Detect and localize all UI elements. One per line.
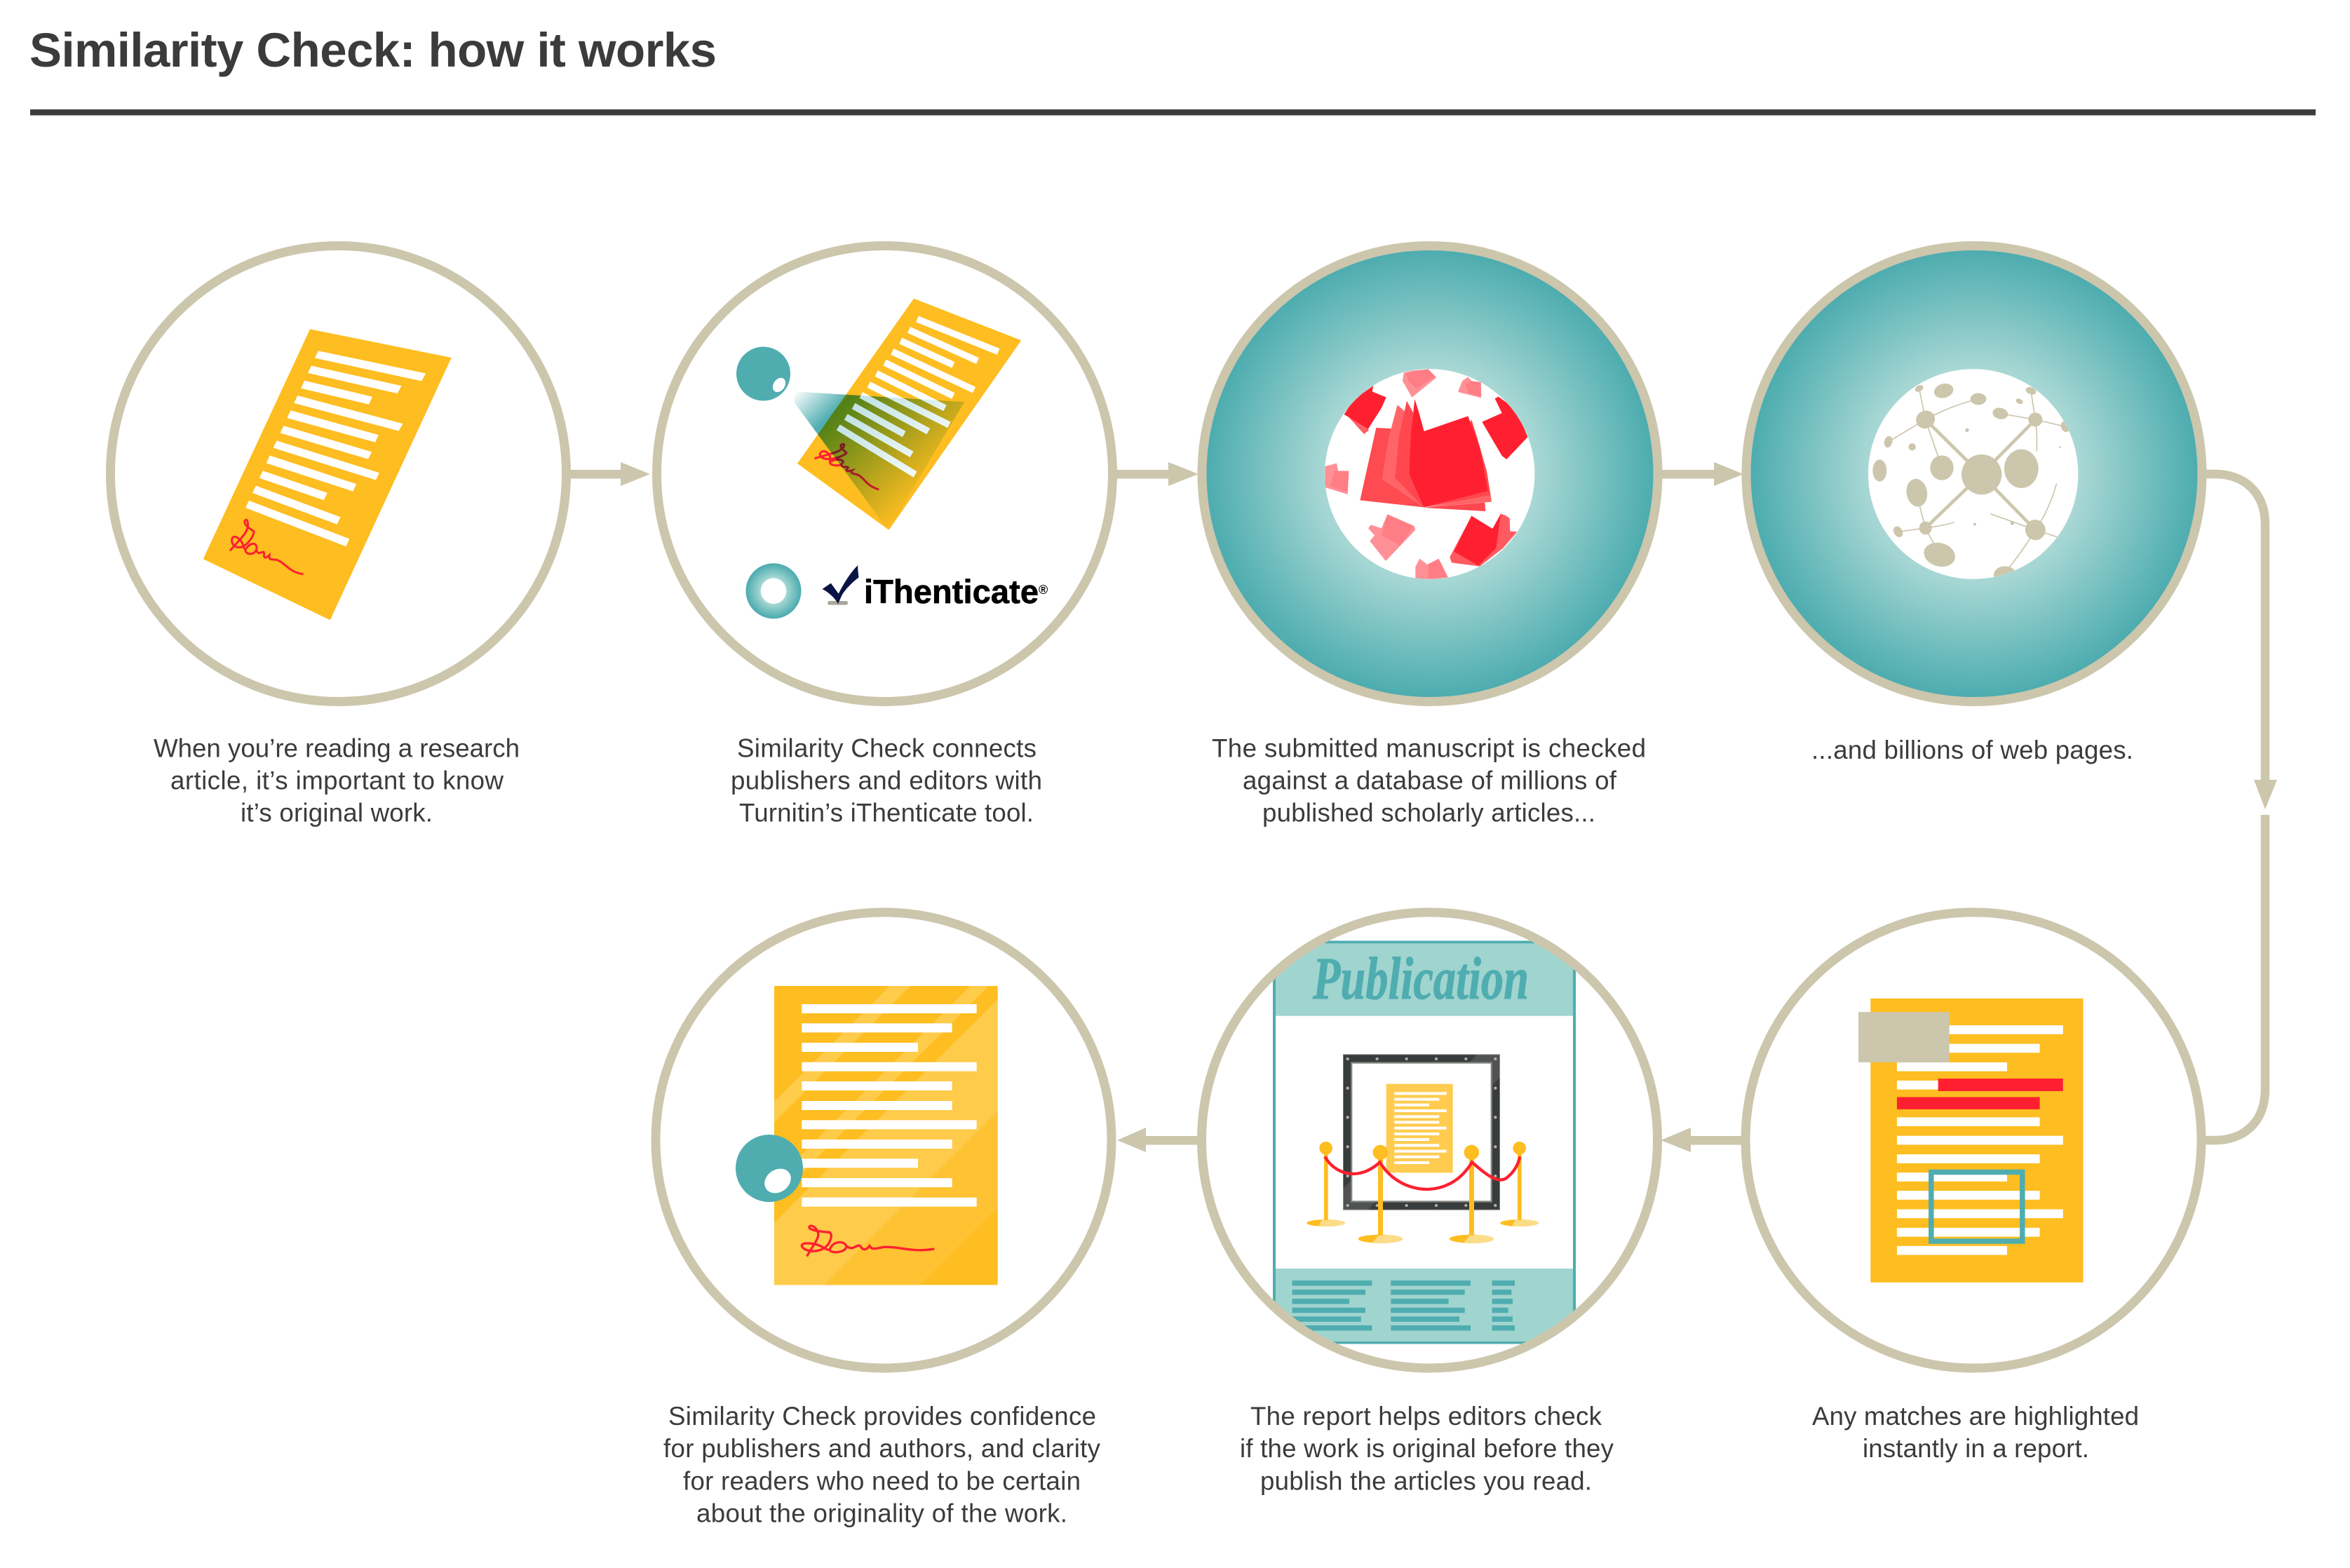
caption: step 3: The submitted manuscript is checked	[1212, 734, 1646, 763]
icon: teal lens	[736, 1135, 803, 1202]
icon: large open book	[1360, 399, 1492, 511]
arrow: step 2 to step 3	[1115, 462, 1198, 486]
panel: step 7 confidence and clarity	[656, 912, 1112, 1368]
title rule	[30, 109, 2316, 115]
panel: step 2 iThenticate scan	[656, 245, 1112, 701]
icon: report document	[1858, 999, 2084, 1283]
red rope	[1325, 1156, 1520, 1189]
panel: step 6 publication	[1202, 912, 1658, 1368]
caption: step 1: it’s original work.	[241, 798, 433, 827]
title: Similarity Check: how it works	[29, 23, 717, 77]
caption: step 5: instantly in a report.	[1863, 1434, 2089, 1463]
logo: iThenticate: iThenticate	[864, 573, 1039, 610]
logo: iThenticate	[823, 565, 1048, 610]
framed document	[1386, 1084, 1453, 1172]
caption: step 7: for readers who need to be certain	[683, 1467, 1081, 1495]
caption: step 6	[1240, 1402, 1614, 1495]
caption: step 6: publish the articles you read.	[1260, 1467, 1592, 1495]
arrow: step 1 to step 2	[568, 462, 650, 486]
caption: step 7: Similarity Check provides confidence	[668, 1402, 1096, 1431]
footer text columns	[1292, 1280, 1515, 1331]
icon: ring logo	[746, 563, 801, 619]
icon: cluster of red books	[1325, 370, 1527, 580]
caption: step 3: published scholarly articles...	[1262, 798, 1595, 827]
arrow: step 6 to step 7	[1117, 1128, 1199, 1152]
caption: step 6: The report helps editors check	[1250, 1402, 1602, 1431]
panel: step 1 reading an article	[111, 245, 567, 701]
caption: step 2: Turnitin’s iThenticate tool.	[739, 798, 1034, 827]
caption: step 4: ...and billions of web pages.	[1811, 736, 2133, 764]
footer band	[1276, 1269, 1573, 1341]
illustration: publication page	[1274, 942, 1574, 1342]
icon: teal selection box	[1931, 1172, 2023, 1241]
icon: tilted document under scan beam	[795, 299, 1021, 530]
icon: tilted signed document	[203, 329, 452, 620]
logo: iThenticate: ®	[1039, 583, 1048, 597]
panel: step 5 report with highlighted matches	[1745, 912, 2201, 1368]
arrow: connector from step 4 down to step 5	[2202, 474, 2277, 1140]
caption: step 1	[154, 734, 520, 827]
rope stanchions	[1306, 1142, 1539, 1243]
caption: step 2: publishers and editors with	[731, 766, 1042, 795]
caption: step 5: Any matches are highlighted	[1812, 1402, 2139, 1431]
caption: step 7: for publishers and authors, and clarity	[663, 1434, 1101, 1463]
illustration: framed article behind rope	[1306, 1054, 1539, 1243]
caption: step 7	[663, 1402, 1101, 1527]
caption: step 6: if the work is original before they	[1240, 1434, 1614, 1463]
panel: step 4 web pages network	[1746, 245, 2202, 701]
icon: grey tab	[1858, 1012, 1950, 1062]
arrow: step 3 to step 4	[1659, 462, 1743, 486]
caption: step 2	[731, 734, 1042, 827]
caption: step 3: against a database of millions of	[1243, 766, 1617, 795]
caption: step 1: article, it’s important to know	[170, 766, 504, 795]
caption: step 5	[1812, 1402, 2139, 1463]
picture frame	[1343, 1054, 1500, 1210]
icon: network of nodes	[1872, 381, 2071, 584]
icon: upright signed document	[774, 986, 998, 1285]
caption: step 7: about the originality of the work.	[696, 1499, 1067, 1527]
heading: Publication: Publication	[1312, 945, 1529, 1012]
highlighted match bars	[1897, 1079, 2063, 1109]
icon: teal lens	[736, 346, 790, 401]
panel: step 3 scholarly articles database	[1202, 245, 1658, 701]
caption: step 2: Similarity Check connects	[737, 734, 1036, 763]
arrow: step 5 to step 6	[1661, 1128, 1743, 1152]
icon: red signature	[227, 518, 314, 582]
header band	[1276, 944, 1573, 1016]
caption: step 3	[1212, 734, 1646, 827]
caption: step 1: When you’re reading a research	[154, 734, 520, 763]
